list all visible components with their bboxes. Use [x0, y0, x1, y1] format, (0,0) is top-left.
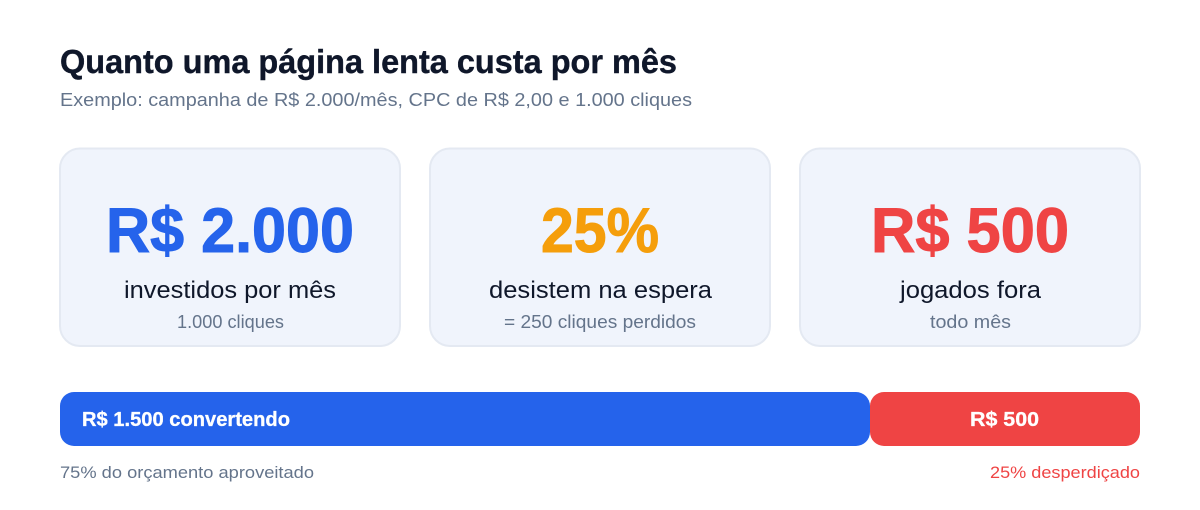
panel: investment: [60, 148, 400, 346]
title: Quanto uma página lenta custa por mês: [60, 43, 677, 80]
big number: 25%: 25%: [541, 196, 659, 266]
subtitle: Exemplo: campanha de R$ 2.000/mês, CPC de R$ 2,00 e 1.000 cliques: [60, 90, 692, 110]
card background: [800, 148, 1140, 346]
panel: abandonment: [430, 148, 770, 346]
caption: budget used: 75% do orçamento aproveitado: [60, 463, 314, 482]
panel: waste: [800, 148, 1140, 346]
bar label: wasted: R$ 500: [970, 408, 1039, 431]
label: desistem na espera: desistem na espera: [489, 277, 713, 304]
note: todo mês: todo mês: [930, 311, 1011, 332]
card background: [430, 148, 770, 346]
big number: R$ 2.000: R$ 2.000: [106, 196, 354, 266]
note: 250 cliques perdidos: = 250 cliques perdidos: [504, 311, 696, 332]
note: 1.000 cliques: 1.000 cliques: [177, 311, 284, 332]
big number: R$ 500: R$ 500: [871, 196, 1069, 266]
caption: budget wasted: 25% desperdiçado: [990, 463, 1140, 482]
card background: [60, 148, 400, 346]
label: jogados fora: jogados fora: [899, 277, 1042, 304]
label: investidos por mês: investidos por mês: [124, 277, 336, 304]
bar label: converting: R$ 1.500 convertendo: [82, 408, 290, 431]
bar segment: converting: [60, 392, 870, 446]
bar segment: wasted: [870, 392, 1140, 446]
budget bar: [60, 392, 1140, 446]
